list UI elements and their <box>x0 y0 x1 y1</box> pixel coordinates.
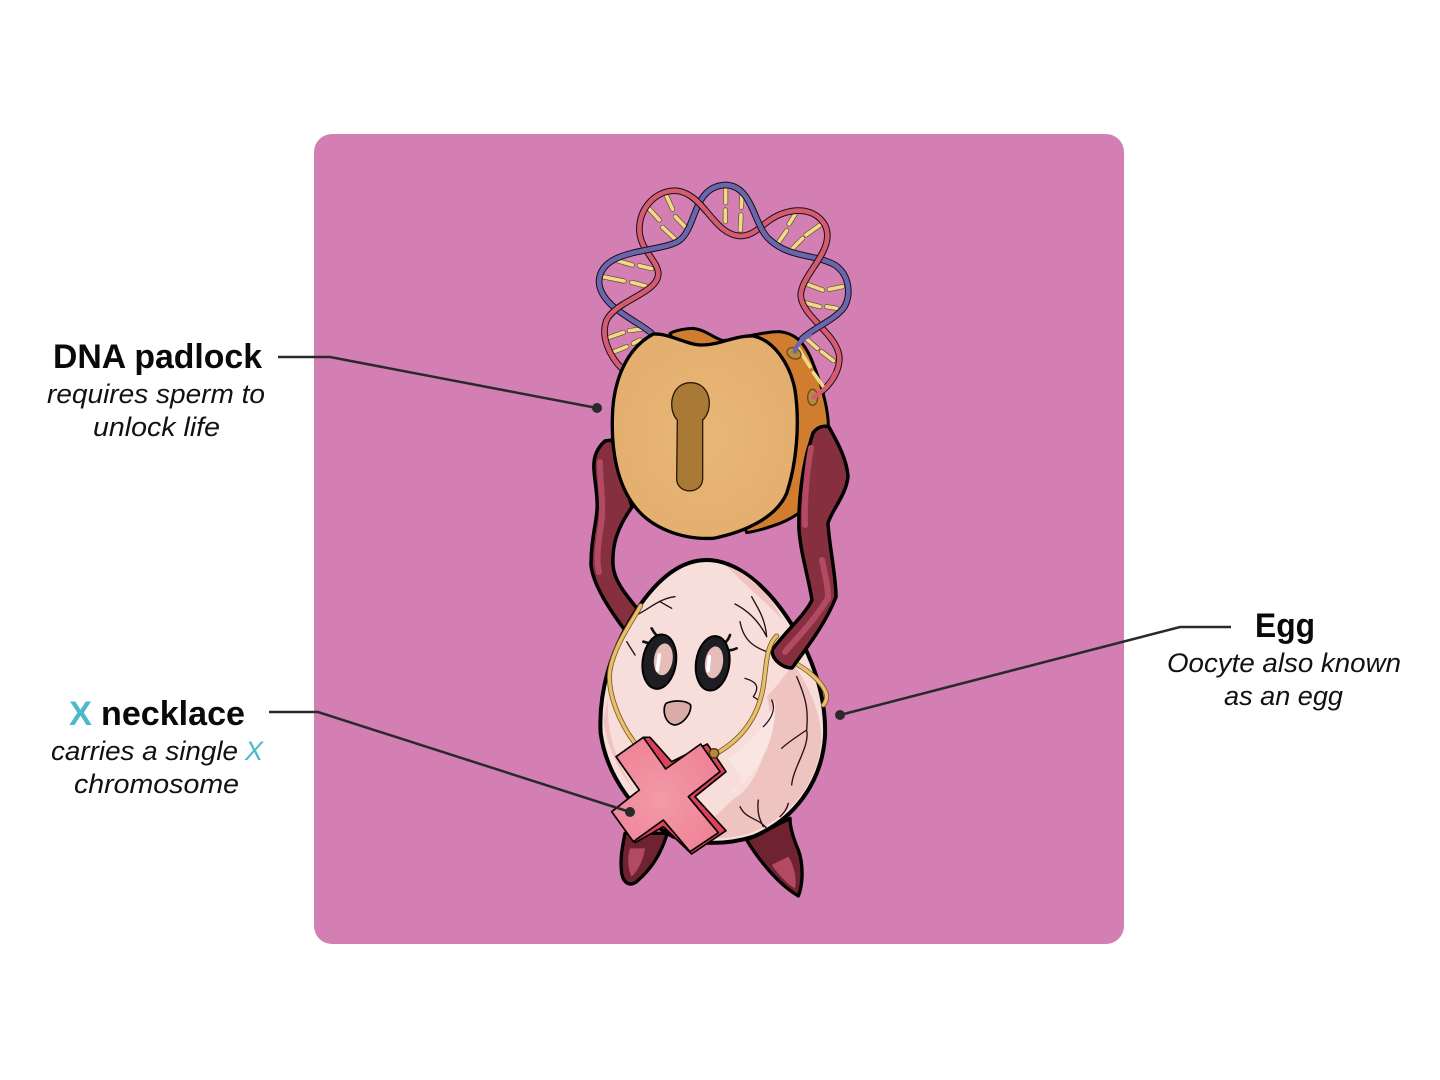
heading: Egg <box>1255 607 1315 645</box>
leader dot <box>592 403 602 413</box>
heading: X <box>69 695 92 733</box>
leader dot <box>625 807 635 817</box>
X pendant <box>612 737 726 854</box>
egg shading <box>683 663 821 838</box>
legs <box>621 818 802 896</box>
description: Oocyte also known <box>1167 648 1401 678</box>
description <box>51 736 264 799</box>
blue strand <box>599 185 848 352</box>
right eye <box>692 634 733 693</box>
pendant clasp <box>709 749 719 758</box>
egg highlight <box>727 700 775 795</box>
eyelashes <box>643 628 737 650</box>
callout: Egg <box>835 607 1401 720</box>
padlock rungs on side <box>797 347 823 387</box>
heading: DNA padlock <box>53 338 262 376</box>
description <box>47 379 265 442</box>
egg foreground <box>609 606 777 854</box>
heading: necklace <box>101 695 245 733</box>
leader line <box>840 627 1231 715</box>
description: carries a single <box>51 736 238 766</box>
callout: X necklace <box>51 695 635 817</box>
pendant side <box>635 737 726 854</box>
DNA rungs <box>603 188 842 361</box>
description: unlock life <box>93 412 220 442</box>
left leg <box>621 833 667 884</box>
mouth <box>664 701 691 725</box>
left arm <box>591 440 640 629</box>
description <box>1167 648 1401 711</box>
pendant front <box>612 737 720 852</box>
egg <box>600 560 827 843</box>
eyes <box>639 628 737 693</box>
callout: DNA padlock <box>47 338 602 442</box>
egg cracks <box>627 597 807 828</box>
leader dot <box>835 710 845 720</box>
right arm <box>772 426 848 668</box>
leader line <box>278 357 597 408</box>
egg body <box>600 560 825 843</box>
character: egg holding DNA padlock <box>591 185 848 896</box>
leader line <box>269 712 630 812</box>
red strand crossings <box>606 195 828 318</box>
red strand <box>605 191 839 397</box>
right leg <box>747 818 802 896</box>
keyhole <box>672 383 709 491</box>
description: requires sperm to <box>47 379 265 409</box>
padlock pegs <box>785 345 818 405</box>
panel: pink background <box>314 134 1124 944</box>
padlock <box>612 328 835 538</box>
description: chromosome <box>74 769 239 799</box>
back necklace cord <box>797 664 827 705</box>
padlock side <box>670 328 828 533</box>
description: X <box>244 736 264 766</box>
necklace cord <box>609 606 777 753</box>
DNA helix <box>599 185 848 397</box>
padlock strand ends <box>813 373 835 397</box>
description: as an egg <box>1224 681 1343 711</box>
left eye <box>639 632 680 691</box>
infographic <box>48 134 1400 944</box>
padlock front <box>612 334 797 538</box>
